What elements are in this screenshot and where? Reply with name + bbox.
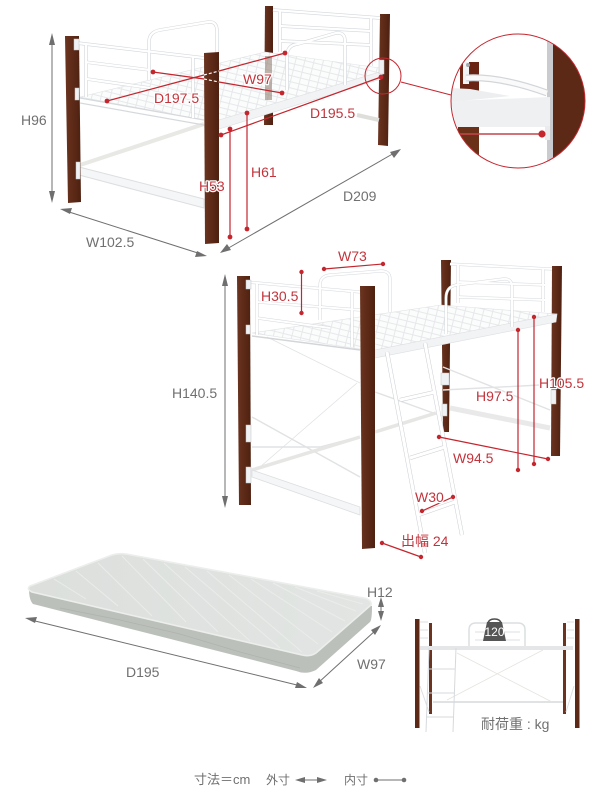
dimension: W94.5: W94.5 xyxy=(453,450,494,466)
detail callout xyxy=(365,34,585,168)
dimension: D197.5: D197.5 xyxy=(154,90,199,106)
dimension: W30: W30 xyxy=(415,489,444,505)
caption: 耐荷重 : kg xyxy=(481,716,549,732)
dimension: W97 xyxy=(313,625,386,688)
dimension: W97 xyxy=(151,70,284,95)
dimension: W30 xyxy=(415,489,455,513)
quilting xyxy=(54,556,363,652)
posts xyxy=(415,619,580,728)
icon: weight: 120 xyxy=(484,625,505,639)
dimension: D197.5 xyxy=(105,51,287,106)
lower frame bars xyxy=(252,408,550,515)
guard rails xyxy=(77,10,380,118)
dimension: H96 xyxy=(21,33,55,203)
cross bracing xyxy=(252,337,550,477)
mattress top xyxy=(28,554,371,656)
dimension: ladder projection xyxy=(380,533,449,559)
dimension: H53 xyxy=(199,127,232,239)
outer dimension key xyxy=(266,773,327,787)
rear posts xyxy=(441,260,562,456)
dimension: H140.5 xyxy=(172,274,228,508)
dimension: D195: D195 xyxy=(126,664,160,680)
guard rails xyxy=(247,264,552,347)
dimension: H61 xyxy=(245,111,277,231)
leader line xyxy=(401,82,451,95)
zoomed detail xyxy=(452,41,584,161)
loft bed with ladder xyxy=(172,248,584,559)
dimension: D195 xyxy=(25,617,307,688)
dimension: W94.5 xyxy=(437,435,550,466)
unit note: 寸法＝cm xyxy=(194,772,250,787)
deck xyxy=(252,305,557,358)
dimension: W73 xyxy=(322,248,385,271)
dimension: W97: W97 xyxy=(243,71,272,87)
dimension: H12: H12 xyxy=(367,584,393,600)
side stitching xyxy=(60,608,300,668)
left post xyxy=(65,36,81,203)
ladder xyxy=(387,343,462,553)
mattress side xyxy=(29,589,372,673)
dimension: W102.5 xyxy=(60,208,207,257)
dimension: H12 xyxy=(367,584,393,621)
deck xyxy=(80,52,383,129)
lower frame bars xyxy=(79,115,379,208)
icon: weight xyxy=(483,619,506,641)
mattress xyxy=(25,554,393,688)
front post xyxy=(204,52,219,244)
dimension: H105.5 xyxy=(532,315,584,466)
dimension: W97: W97 xyxy=(357,656,386,672)
legend xyxy=(194,772,406,787)
dimension: D195.5: D195.5 xyxy=(310,105,355,121)
dimension: H30.5: H30.5 xyxy=(261,288,299,304)
dimension: H97.5 xyxy=(476,328,520,472)
dimension: H97.5: H97.5 xyxy=(476,388,514,404)
outer dimension key: 外寸 xyxy=(266,773,290,787)
brackets xyxy=(246,280,556,483)
inner dimension key: 内寸 xyxy=(344,773,368,787)
dimension: D209: D209 xyxy=(343,188,377,204)
dimension: D195.5 xyxy=(219,75,383,137)
inner dimension key xyxy=(344,773,406,787)
rear posts xyxy=(264,6,390,146)
dimension: D209 xyxy=(220,149,401,253)
front post xyxy=(360,286,375,549)
dimension: ladder projection: 出幅 24 xyxy=(401,533,449,549)
left post xyxy=(237,276,251,505)
dimension: W102.5: W102.5 xyxy=(86,234,134,250)
brackets xyxy=(74,39,384,179)
dimension: H61: H61 xyxy=(251,164,277,180)
ladder xyxy=(426,648,456,732)
dimension: W73: W73 xyxy=(338,248,367,264)
dimension: H30.5 xyxy=(261,270,304,315)
frame xyxy=(420,622,574,712)
locator circle xyxy=(365,58,401,94)
dimension: H105.5: H105.5 xyxy=(539,375,584,391)
load capacity diagram xyxy=(415,619,580,732)
dimension: H53: H53 xyxy=(199,178,225,194)
dimension: H96: H96 xyxy=(21,112,47,128)
top bed photo xyxy=(21,6,401,257)
detail circle outline xyxy=(451,34,585,168)
dimension: H140.5: H140.5 xyxy=(172,385,217,401)
